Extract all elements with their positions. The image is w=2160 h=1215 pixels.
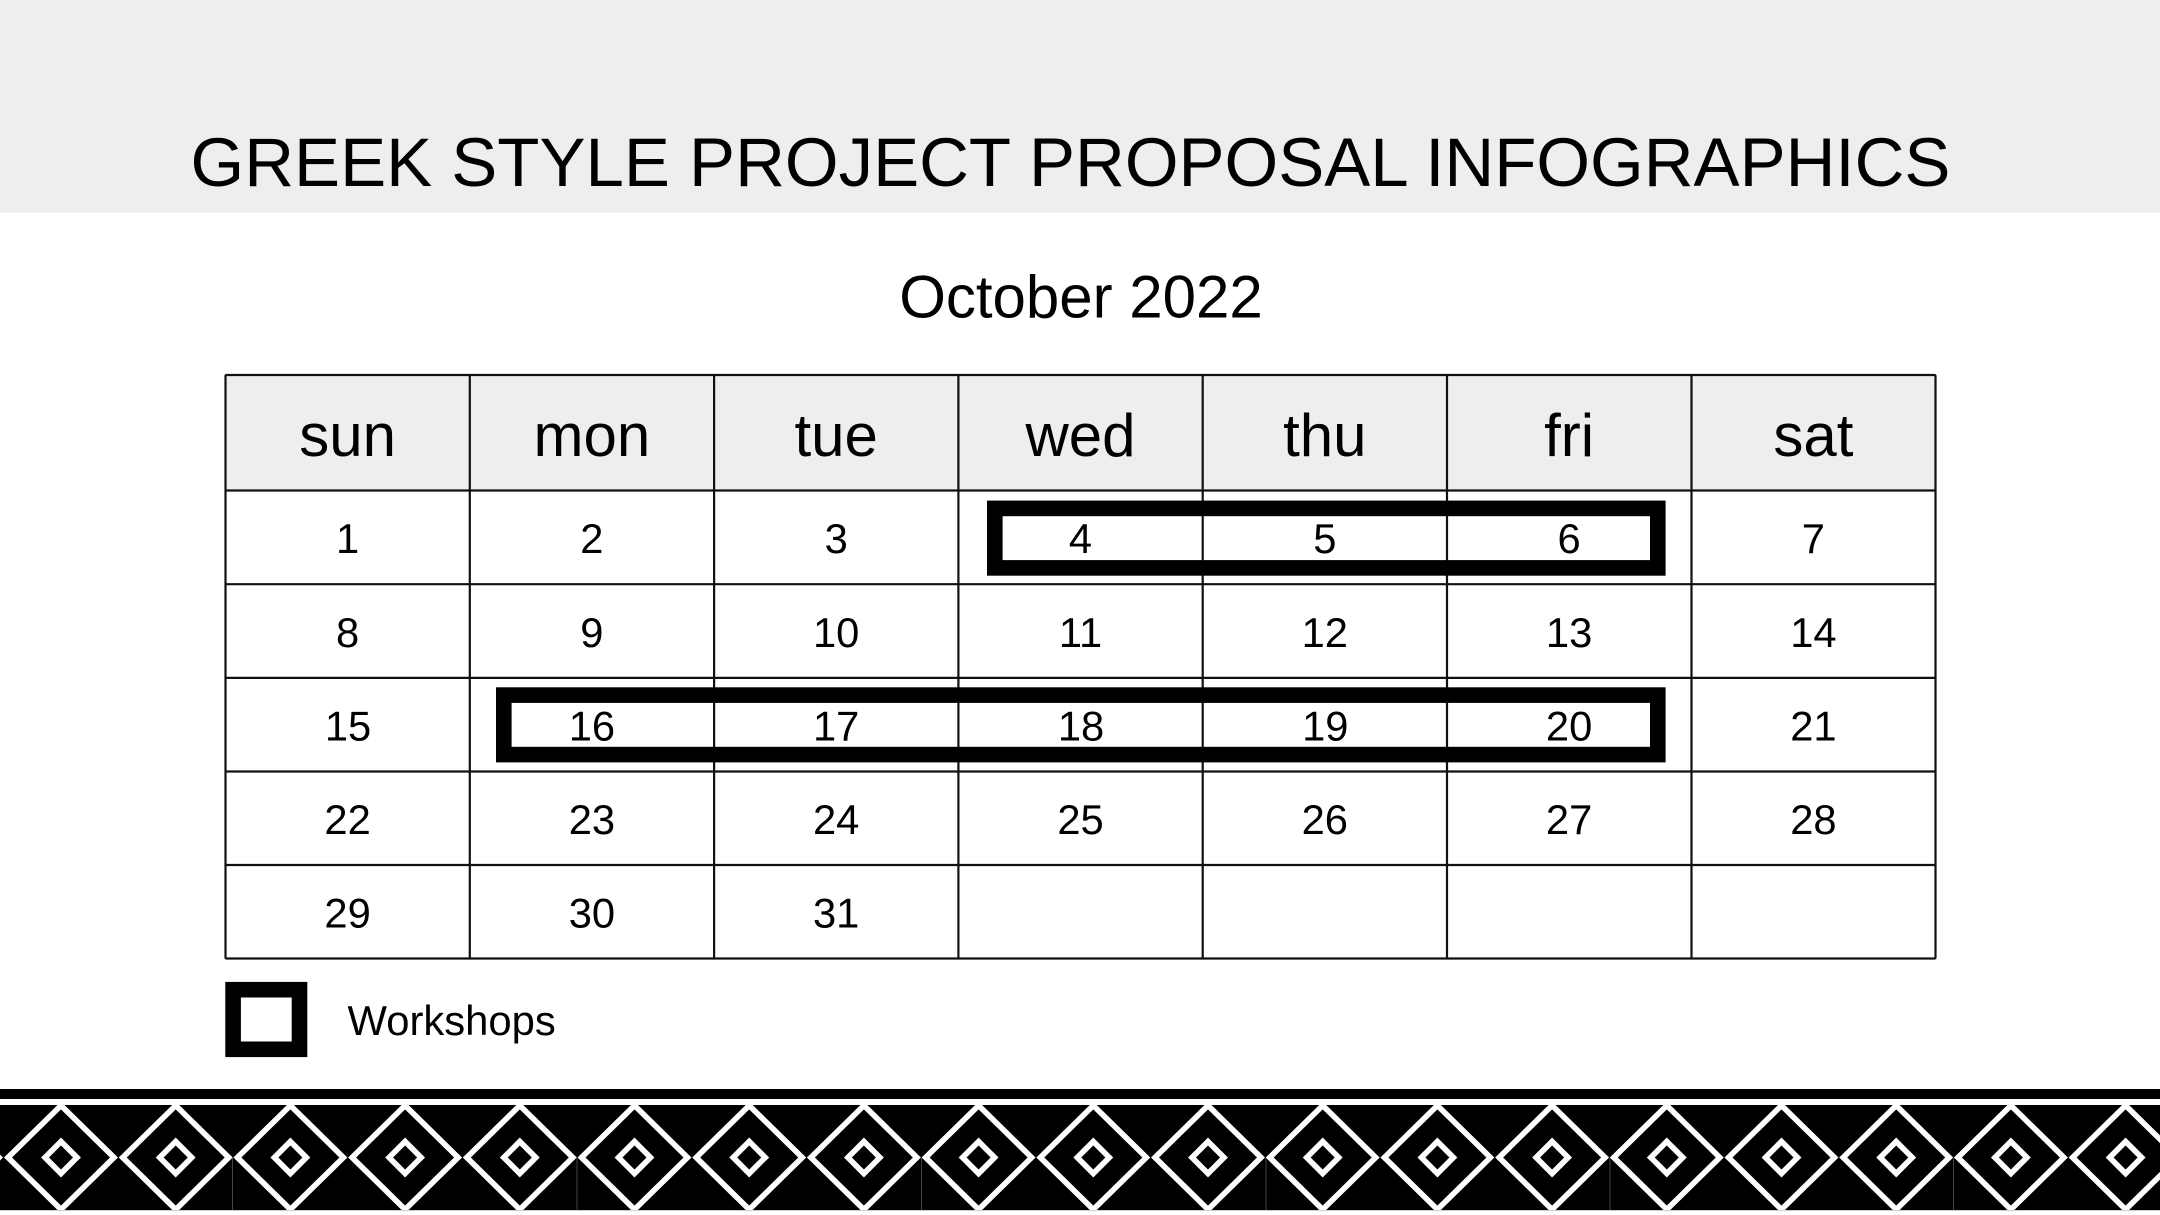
legend label: Workshops <box>348 997 556 1044</box>
title: GREEK STYLE PROJECT PROPOSAL INFOGRAPHICS <box>191 124 1950 201</box>
weekday header row: fri <box>1544 402 1594 469</box>
calendar table <box>226 375 1936 958</box>
calendar day numbers: 26 <box>1302 796 1348 843</box>
weekday header row: wed <box>1024 402 1136 469</box>
border top bar <box>0 1089 2160 1099</box>
calendar day numbers: 15 <box>325 702 371 750</box>
decorative Greek border <box>0 1089 2160 1211</box>
calendar day numbers: 19 <box>1302 702 1348 750</box>
calendar day numbers: 16 <box>569 702 615 750</box>
border diamond pattern <box>0 1105 2160 1210</box>
calendar day numbers: 7 <box>1802 515 1825 562</box>
calendar day numbers <box>324 515 1837 936</box>
calendar day numbers: 10 <box>813 609 859 656</box>
weekday header row: sat <box>1773 402 1854 469</box>
calendar day numbers: 24 <box>813 796 859 843</box>
calendar day numbers: 9 <box>580 609 603 656</box>
calendar day numbers: 2 <box>580 515 603 562</box>
legend swatch <box>233 990 300 1049</box>
calendar day numbers: 28 <box>1790 796 1837 843</box>
calendar day numbers: 11 <box>1059 609 1102 656</box>
calendar month heading: October 2022 <box>899 264 1263 330</box>
calendar day numbers: 1 <box>336 515 359 562</box>
calendar day numbers: 22 <box>324 796 371 843</box>
header band <box>0 0 2160 213</box>
calendar day numbers: 27 <box>1546 796 1592 843</box>
weekday header row: tue <box>794 402 878 469</box>
calendar day numbers: 4 <box>1069 515 1092 562</box>
weekday header row: thu <box>1283 402 1367 469</box>
calendar day numbers: 20 <box>1546 702 1592 750</box>
weekday header row <box>226 375 1936 490</box>
calendar day numbers: 8 <box>336 609 359 656</box>
calendar day numbers: 29 <box>324 890 371 936</box>
calendar day numbers: 12 <box>1302 609 1348 656</box>
calendar day numbers: 31 <box>813 890 859 936</box>
weekday header row: sun <box>299 402 396 469</box>
calendar day numbers: 30 <box>569 890 615 936</box>
calendar day numbers: 25 <box>1057 796 1104 843</box>
workshop highlight: October 16 to 20 <box>504 695 1658 755</box>
calendar day numbers: 5 <box>1313 515 1336 562</box>
calendar day numbers: 13 <box>1546 609 1592 656</box>
calendar day numbers: 18 <box>1058 702 1104 750</box>
calendar grid lines <box>226 375 1936 958</box>
calendar day numbers: 23 <box>569 796 615 843</box>
calendar day numbers: 17 <box>813 702 859 750</box>
calendar day numbers: 6 <box>1558 515 1581 562</box>
weekday header row: mon <box>534 402 650 469</box>
calendar day numbers: 21 <box>1790 702 1837 750</box>
workshop highlight: October 4 to 6 <box>995 508 1658 568</box>
calendar day numbers: 14 <box>1790 609 1837 656</box>
calendar day numbers: 3 <box>825 515 848 562</box>
legend <box>233 990 556 1049</box>
